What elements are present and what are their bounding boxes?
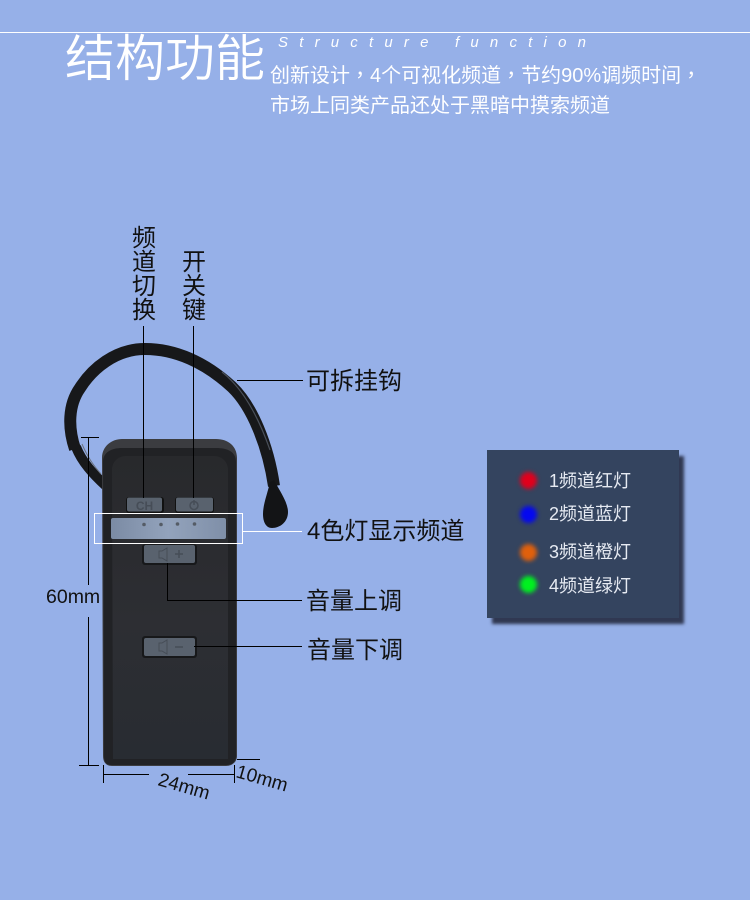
- panel: led legend: [487, 450, 679, 618]
- dimension label 24mm: 24mm: [156, 770, 212, 804]
- label: power key: 开关键: [182, 249, 206, 324]
- orange dot: [520, 544, 537, 561]
- volume up button: [142, 544, 197, 565]
- label: channel switch: 频道切换: [132, 225, 156, 324]
- green label: 4频道绿灯: [549, 576, 631, 596]
- led bar: [111, 518, 226, 539]
- description text: [270, 59, 701, 117]
- label: four color led: 4色灯显示频道: [307, 518, 464, 545]
- english subtitle: Structure function: [278, 34, 597, 51]
- channel button: CH: [136, 499, 153, 513]
- title: 结构功能: [65, 31, 265, 87]
- label: volume up: 音量上调: [306, 588, 402, 615]
- red dot: [520, 472, 537, 489]
- description text: 创新设计，4个可视化频道，节约90%调频时间，: [270, 59, 701, 88]
- label: volume down: 音量下调: [307, 637, 403, 664]
- device body: [102, 439, 237, 766]
- ear hook: [70, 349, 288, 528]
- dimension label 60mm: 60mm: [46, 586, 100, 608]
- label: detachable hook: 可拆挂钩: [306, 368, 402, 395]
- green dot: [520, 576, 537, 593]
- orange label: 3频道橙灯: [549, 542, 631, 562]
- blue label: 2频道蓝灯: [549, 504, 631, 524]
- blue dot: [520, 506, 537, 523]
- description text: 市场上同类产品还处于黑暗中摸索频道: [270, 95, 610, 117]
- top rule: [0, 32, 750, 33]
- callout lines: [144, 326, 303, 646]
- channel button: [126, 497, 164, 513]
- dimension lines: [79, 437, 260, 783]
- volume down button: [142, 636, 197, 658]
- red label: 1频道红灯: [549, 471, 631, 491]
- power button: [175, 497, 214, 513]
- dimension label 10mm: 10mm: [234, 762, 290, 796]
- led highlight frame: [94, 514, 242, 544]
